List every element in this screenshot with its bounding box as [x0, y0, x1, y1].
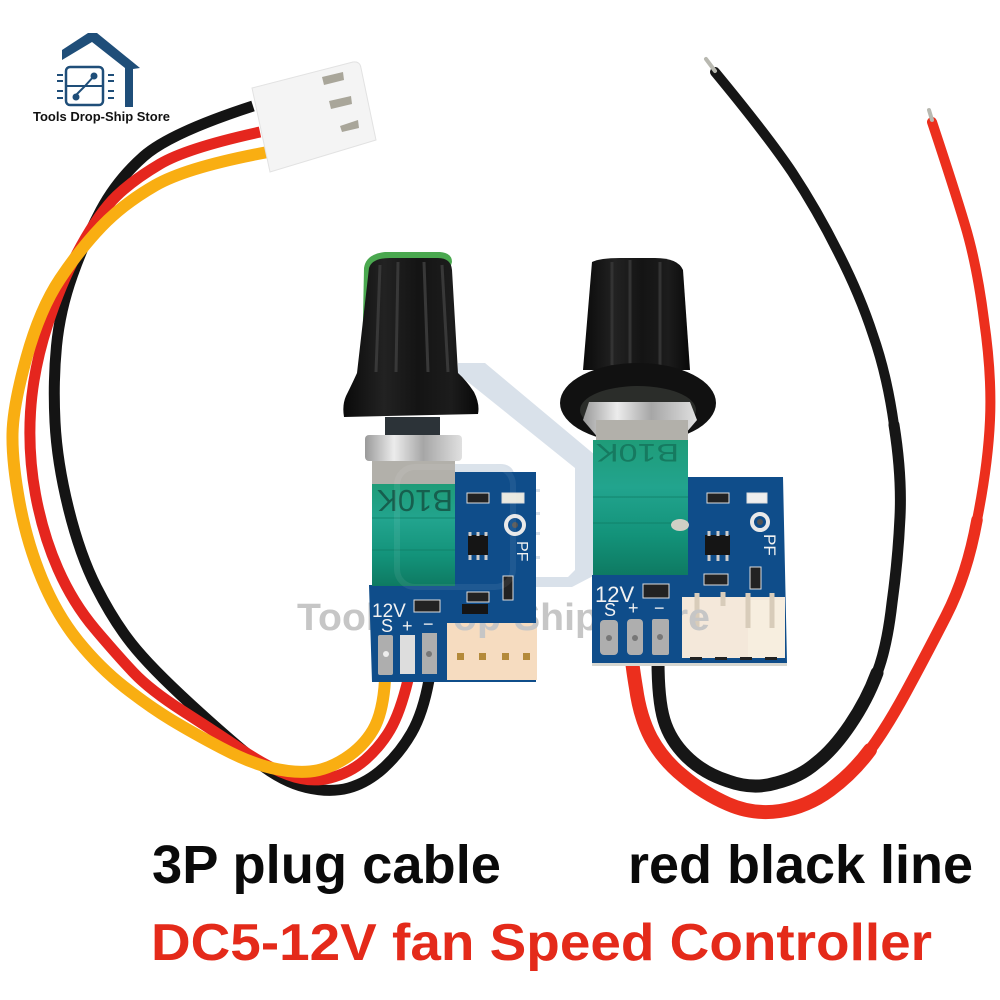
- left board labels: S: [381, 616, 393, 636]
- right solder pads: [600, 619, 669, 655]
- left green potentiometer B10K: [372, 483, 455, 586]
- caption: 3P plug cable: 3P plug cable: [152, 835, 501, 895]
- left wires: 3P plug cable: [12, 106, 429, 790]
- watermark overlay on left board: [397, 467, 513, 587]
- right green potentiometer B10K: [593, 438, 689, 575]
- watermark letters over connectors: Tools Drop-Ship Store: [297, 597, 710, 639]
- left controller module: [343, 252, 537, 682]
- right PCB: [592, 477, 787, 665]
- logo text: Tools Drop-Ship Store: [33, 110, 170, 124]
- left board labels: PF: [513, 541, 530, 562]
- right board labels: [595, 534, 779, 620]
- left board components: [414, 493, 524, 614]
- logo: Tools Drop-Ship Store: [33, 33, 170, 124]
- right board labels: PF: [760, 534, 779, 556]
- watermark: house logo: [440, 363, 595, 587]
- left green potentiometer B10K: B10K: [377, 483, 453, 518]
- right board labels: S: [604, 600, 616, 620]
- right board labels: +: [628, 598, 639, 618]
- left solder pads: [378, 633, 437, 675]
- right board labels: 12V: [595, 582, 634, 607]
- logo house icon: [57, 33, 140, 107]
- left shaft and nut: [365, 417, 462, 485]
- watermark: store name: Tools Drop-Ship Store: [297, 597, 710, 639]
- left board labels: +: [402, 616, 413, 636]
- right white connector: [682, 592, 785, 660]
- caption: red black line: red black line: [628, 835, 973, 895]
- right knob: [560, 258, 716, 443]
- left PCB: [369, 472, 536, 682]
- right board components: [643, 493, 768, 598]
- right shaft and nut: [583, 402, 697, 442]
- left 3P white connector: [252, 62, 376, 172]
- left board labels: −: [423, 614, 434, 634]
- right controller module: [560, 258, 787, 666]
- right green potentiometer B10K: B10K: [596, 438, 679, 466]
- left board labels: [372, 541, 530, 636]
- left 4-pin connector: [447, 623, 537, 680]
- right wires: red black line: [632, 59, 990, 812]
- right board labels: −: [654, 598, 665, 618]
- left knob: [343, 252, 478, 417]
- title: DC5-12V fan Speed Controller: DC5-12V fan Speed Controller: [151, 914, 932, 972]
- left board labels: 12V: [372, 601, 406, 622]
